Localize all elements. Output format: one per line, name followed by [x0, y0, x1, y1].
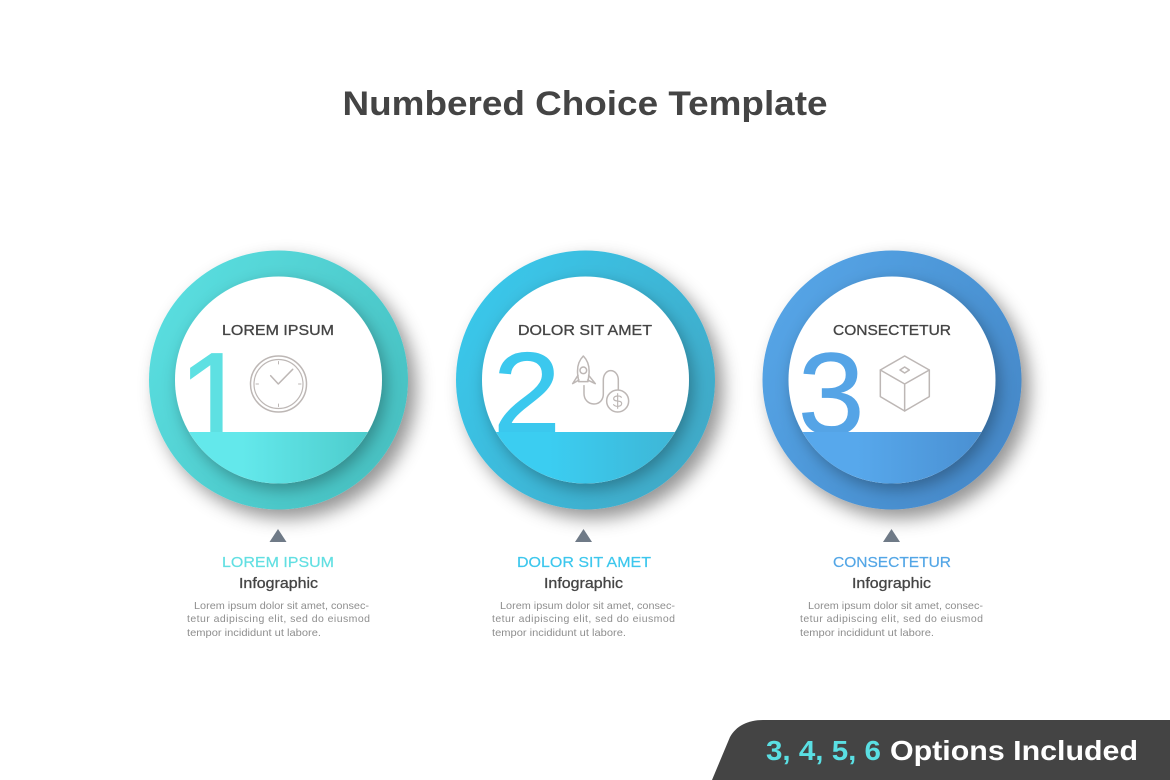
description 3: Lorem ipsum dolor sit amet, consec-: [808, 600, 984, 612]
color band 2: [496, 432, 675, 484]
color band 3: [802, 432, 982, 484]
panel: option 1 circle: [149, 250, 408, 510]
subheading 2: DOLOR SIT AMET: [517, 554, 651, 571]
panel: option 3 circle: [762, 250, 1022, 510]
heading 2: DOLOR SIT AMET: [518, 322, 652, 339]
description 1: tempor incididunt ut labore.: [187, 627, 321, 639]
subheading 3: CONSECTETUR: [833, 554, 951, 571]
icon: clock: [250, 356, 306, 412]
banner label: Options Included: [890, 735, 1138, 766]
banner numbers: 3, 4, 5, 6: [766, 735, 881, 766]
number 2: 2: [493, 330, 561, 457]
heading 3: CONSECTETUR: [833, 322, 951, 339]
marker triangle 3: [883, 529, 900, 542]
description 3: tetur adipiscing elit, sed do eiusmod: [800, 613, 983, 625]
label 2: Infographic: [544, 576, 623, 592]
marker triangle 1: [270, 529, 286, 542]
description 1: tetur adipiscing elit, sed do eiusmod: [187, 613, 370, 625]
description 2: [492, 600, 676, 639]
description 1: [187, 600, 370, 639]
number 1: 1: [178, 325, 250, 471]
subheading 1: LOREM IPSUM: [222, 554, 334, 571]
description 2: tempor incididunt ut labore.: [492, 627, 626, 639]
color band 1: [189, 432, 368, 484]
marker triangle 2: [575, 529, 592, 542]
banner: options included: [712, 720, 1170, 780]
column: option 1 text: [187, 529, 370, 639]
icon: box: [880, 356, 929, 411]
description 1: Lorem ipsum dolor sit amet, consec-: [194, 600, 370, 612]
label 1: Infographic: [239, 576, 318, 592]
panel: option 2 circle: [456, 250, 715, 510]
column: option 3 text: [800, 529, 984, 639]
description 3: [800, 600, 984, 639]
description 2: tetur adipiscing elit, sed do eiusmod: [492, 613, 675, 625]
column: option 2 text: [492, 529, 676, 639]
title: Numbered Choice Template: [342, 85, 828, 123]
heading 1: LOREM IPSUM: [222, 322, 334, 339]
icon: rocket to dollar: [573, 356, 629, 412]
description 3: tempor incididunt ut labore.: [800, 627, 934, 639]
label 3: Infographic: [852, 576, 931, 592]
number 3: 3: [798, 329, 864, 459]
description 2: Lorem ipsum dolor sit amet, consec-: [500, 600, 676, 612]
